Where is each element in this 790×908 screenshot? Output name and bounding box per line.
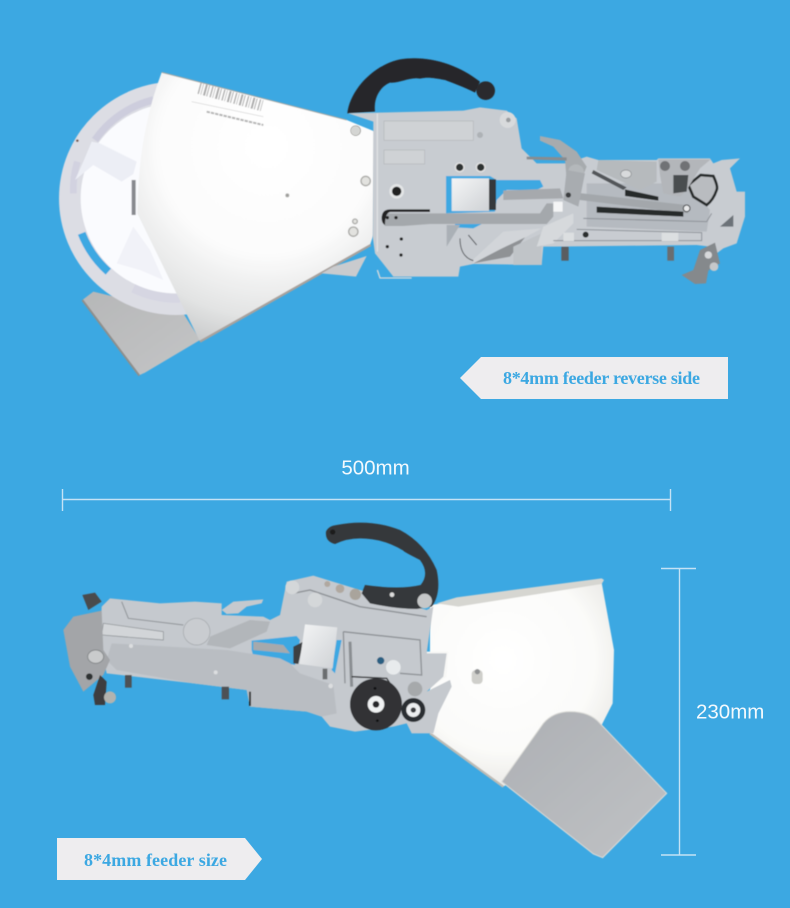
caption: feeder size [57,838,262,880]
rod and rocker arm [503,136,688,213]
notch shadow [247,692,253,706]
photo: feeder front side, mechanism [63,523,452,733]
plate stud [472,669,483,684]
upper body crease [122,602,183,625]
cavity shading [587,183,710,232]
end plate [63,611,110,692]
tape reel [59,82,292,315]
body side seam [375,113,379,252]
body channels [553,213,712,241]
small black wheel [401,698,425,722]
photo: feeder front side, plate [430,578,667,858]
upper rail [102,623,163,640]
top latch tip [222,599,263,614]
height dimension: 230mm: 230mm [696,700,764,724]
diagonal arm [207,620,270,648]
grey tape tab [82,292,200,376]
black spring and slots [563,170,733,241]
body holes and screws [351,112,690,257]
main body casting [100,576,452,733]
rod and connector [253,642,290,653]
right bracket plate window [427,652,448,690]
sensor block [293,624,337,679]
black handle [326,523,438,609]
caption: feeder reverse side: 8*4mm feeder reverse side [503,368,700,388]
large black wheel [350,678,402,730]
lower pins and latch [561,243,720,284]
grey tape tab [502,712,667,858]
barcode sticker [192,88,263,125]
end plate screws [86,650,104,680]
plate screws [286,126,370,236]
main body casting [348,107,745,277]
right frame ribs [293,590,427,687]
photo: feeder reverse side, reel and plate [59,72,375,376]
recessed panels [384,121,473,164]
metal cover plate [430,583,614,787]
lower strut area [447,213,573,265]
cam plate [597,159,717,205]
lower slab [107,643,337,717]
pins and lever [82,593,229,705]
caption: feeder size: 8*4mm feeder size [84,850,227,870]
photo: feeder reverse side, mechanism [347,58,745,284]
window cut-out [446,176,543,213]
window cut-out [252,636,300,665]
round cap [183,618,210,645]
small window strip [332,640,342,673]
white sensor block [452,178,496,211]
frame holes [129,580,422,696]
plate lower edge [430,733,503,787]
plate top edge [162,72,347,120]
small foot wire [377,270,412,278]
gap under bar [455,224,482,228]
black handle [347,58,495,113]
width dimension: 500mm: 500mm [341,456,410,480]
bracket under plate [322,256,367,277]
caption: feeder reverse side [460,357,728,399]
plate lower edge [200,245,371,342]
top rim [437,578,604,607]
metal cover plate [137,72,375,342]
horizontal link bar [382,202,563,226]
